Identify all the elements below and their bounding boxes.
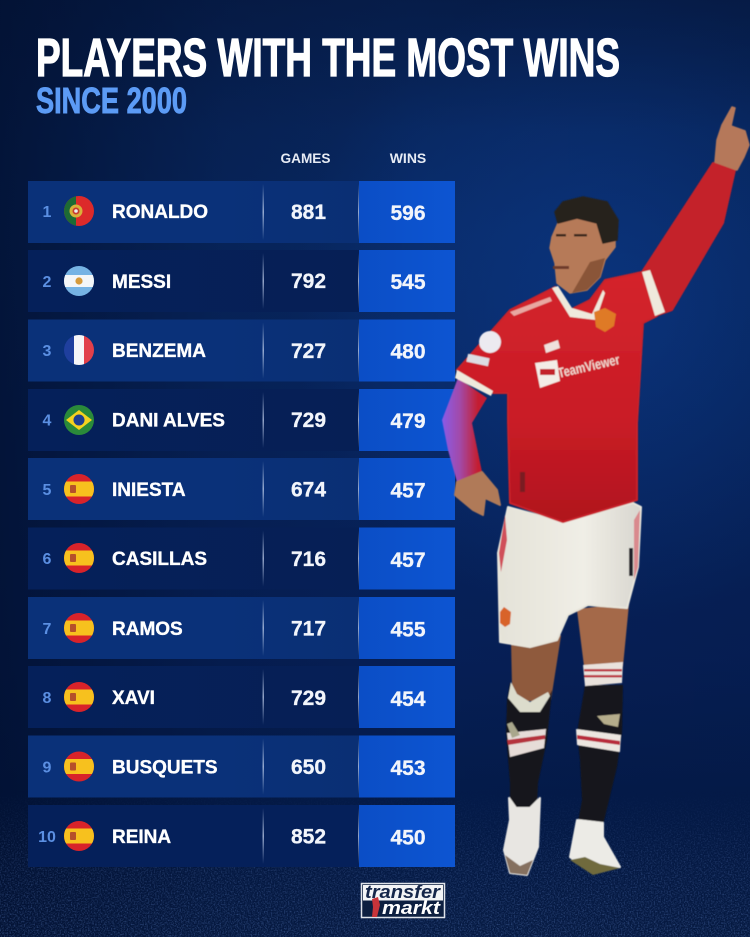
- row 6: Casillas: 6: [43, 551, 52, 568]
- column header: games: GAMES: [280, 150, 330, 166]
- player figure: [442, 107, 749, 875]
- row 10: Reina: 450: [390, 826, 426, 850]
- right sock: [576, 662, 623, 825]
- transfermarkt logo: markt: [382, 898, 441, 918]
- row 1: Ronaldo: 596: [390, 202, 426, 225]
- row 9: Busquets: 650: [291, 756, 326, 779]
- transfermarkt logo: [362, 882, 444, 918]
- row 3: Benzema: [28, 320, 455, 382]
- row 4: Dani Alves: DANI ALVES: [112, 410, 225, 432]
- flag: France: [64, 335, 94, 365]
- flag: Spain: [64, 752, 94, 782]
- row 1: Ronaldo: RONALDO: [112, 202, 208, 223]
- row 3: Benzema: 480: [390, 340, 426, 364]
- row 10: Reina: REINA: [112, 827, 171, 848]
- flag: Brazil: [64, 405, 94, 435]
- row 4: Dani Alves: 4: [43, 412, 52, 430]
- boots: [504, 798, 620, 875]
- row 7: Ramos: 717: [291, 618, 326, 640]
- row 2: Messi: 2: [43, 274, 52, 291]
- row 2: Messi: 545: [390, 271, 426, 294]
- row 5: Iniesta: 5: [43, 482, 52, 499]
- league patch: [479, 331, 501, 353]
- row 10: Reina: 852: [291, 826, 326, 848]
- row 1: Ronaldo: [28, 181, 455, 243]
- left thigh: [510, 636, 560, 700]
- row 8: Xavi: XAVI: [112, 688, 155, 709]
- row 8: Xavi: [28, 666, 455, 728]
- row 2: Messi: MESSI: [112, 272, 171, 293]
- row 2: Messi: [28, 250, 455, 312]
- raised arm: [642, 163, 735, 316]
- row 9: Busquets: 453: [390, 757, 426, 780]
- row 7: Ramos: [28, 597, 455, 659]
- row 8: Xavi: 8: [43, 690, 52, 707]
- right thigh: [578, 604, 628, 666]
- row 3: Benzema: 727: [291, 340, 326, 363]
- row 6: Casillas: [28, 528, 455, 590]
- subtitle: SINCE 2000: [36, 80, 187, 121]
- flag: Spain: [64, 821, 94, 851]
- row 7: Ramos: 7: [43, 621, 52, 638]
- jersey: [455, 270, 665, 522]
- row 1: Ronaldo: 1: [43, 204, 52, 221]
- row 9: Busquets: BUSQUETS: [112, 758, 218, 778]
- raised hand: [715, 107, 749, 170]
- row 9: Busquets: [28, 736, 455, 798]
- row 8: Xavi: 454: [390, 688, 426, 711]
- row 4: Dani Alves: 479: [390, 410, 426, 433]
- row 5: Iniesta: 457: [390, 480, 426, 502]
- sponsor badge: [535, 360, 560, 388]
- neck and face: [550, 218, 615, 293]
- sponsor text: TeamViewer: [556, 351, 621, 381]
- row 6: Casillas: CASILLAS: [112, 549, 207, 570]
- row 5: Iniesta: INIESTA: [112, 480, 186, 501]
- row 6: Casillas: 716: [291, 548, 326, 571]
- row 8: Xavi: 729: [291, 687, 326, 710]
- row 7: Ramos: RAMOS: [112, 619, 183, 640]
- row 4: Dani Alves: [28, 389, 455, 451]
- hair: [555, 197, 618, 243]
- flag: Argentina: [64, 266, 94, 296]
- left sock: [506, 682, 552, 807]
- row 3: Benzema: 3: [43, 343, 52, 360]
- flag: Spain: [64, 474, 94, 504]
- row 5: Iniesta: [28, 458, 455, 520]
- row 2: Messi: 792: [291, 270, 326, 293]
- row 5: Iniesta: 674: [291, 478, 326, 502]
- shorts: [498, 503, 641, 647]
- flag: Spain: [64, 682, 94, 712]
- row 7: Ramos: 455: [390, 618, 426, 642]
- row 6: Casillas: 457: [390, 549, 426, 572]
- row 10: Reina: [28, 805, 455, 867]
- row 9: Busquets: 9: [43, 760, 52, 776]
- flag: Spain: [64, 543, 94, 573]
- transfermarkt logo: transfer: [365, 882, 441, 902]
- row 4: Dani Alves: 729: [291, 409, 326, 432]
- left hand: [455, 472, 500, 515]
- row 1: Ronaldo: 881: [291, 201, 326, 224]
- left forearm: [442, 378, 487, 482]
- club crest: [594, 308, 616, 332]
- flag: Spain: [64, 613, 94, 643]
- column header: wins: WINS: [390, 150, 426, 166]
- row 10: Reina: 10: [38, 829, 56, 846]
- row 3: Benzema: BENZEMA: [112, 341, 206, 362]
- flag: Portugal: [64, 196, 94, 226]
